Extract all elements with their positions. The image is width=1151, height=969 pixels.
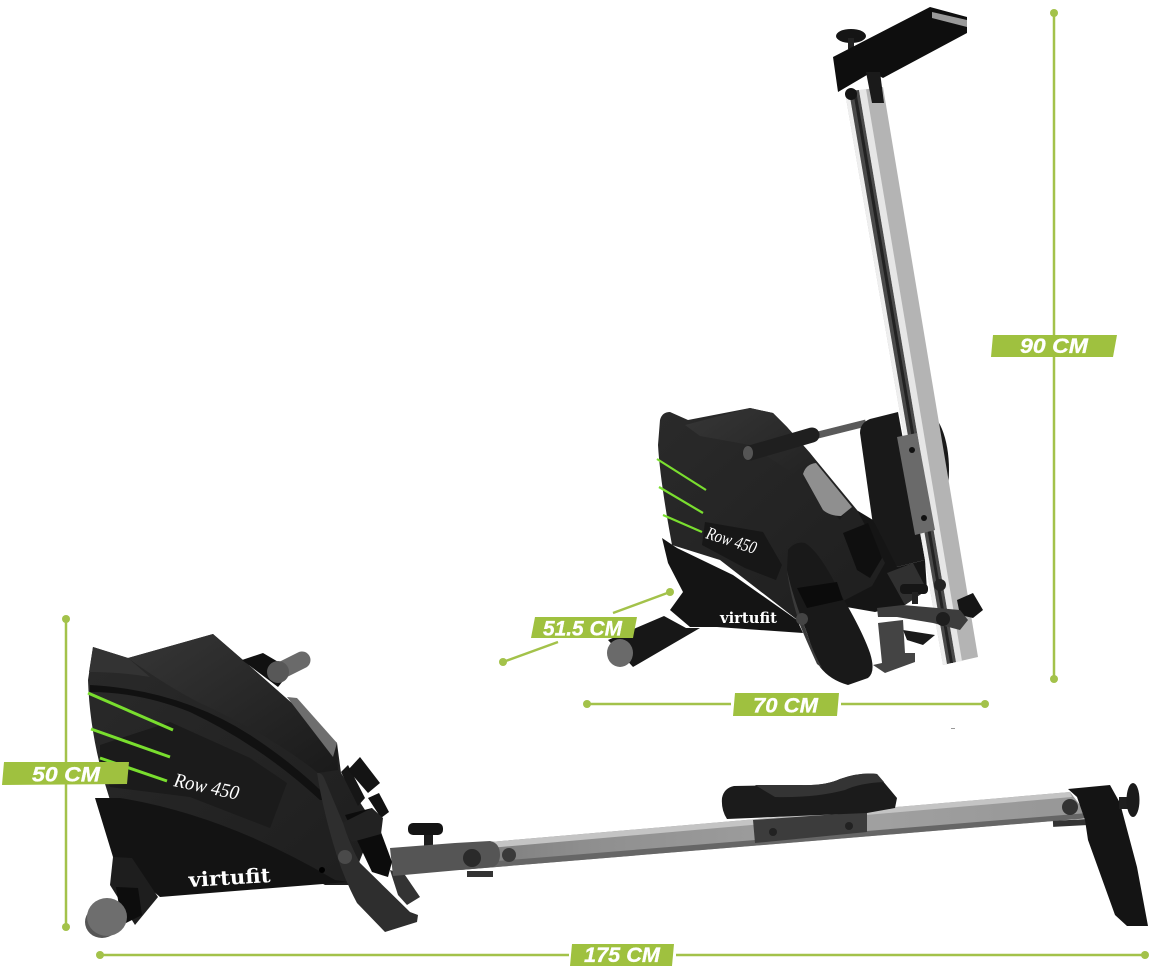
upright housing [658, 408, 885, 622]
upright flywheel disc behind rail [901, 412, 949, 528]
upright rear frame under seat [887, 563, 927, 605]
dimension: 70 cm width [583, 693, 989, 718]
upright rail bracket [897, 433, 983, 618]
flat handle [242, 653, 302, 687]
dimension: 90 cm height [991, 9, 1117, 683]
upright top bracket [833, 7, 967, 103]
flat green stripes [88, 693, 173, 781]
upright seat pad [860, 412, 925, 567]
upright handle grip [743, 435, 812, 460]
upright rear post [873, 584, 968, 673]
flat seat [722, 774, 897, 819]
dimension: 51.5 cm depth: 51.5 CM [543, 618, 622, 640]
dimension: 175 cm length: 175 CM [584, 944, 661, 967]
upright front stabilizer [607, 616, 700, 667]
dimension: 51.5 cm depth [499, 588, 674, 666]
flat end bracket [1053, 783, 1148, 926]
flat top left cap [89, 647, 150, 677]
upright model name: Row 450 [703, 523, 759, 558]
flat foot plate [317, 773, 418, 932]
flat display [287, 697, 337, 757]
flat top cover [128, 634, 338, 773]
upright dark mechanism [835, 500, 927, 612]
dimension: 90 cm height: 90 CM [1020, 335, 1089, 358]
flat base [95, 798, 348, 897]
flat front stabilizer [85, 857, 158, 938]
flat rail [455, 792, 1090, 870]
upright brand: virtufit [719, 609, 777, 627]
flat base bolt [319, 867, 325, 873]
flat side panel [100, 722, 287, 828]
flat lower bracket [390, 870, 420, 905]
upright rail [845, 87, 978, 665]
upright display [803, 463, 852, 516]
flat model name: Row 450 [171, 769, 241, 805]
upright green stripes [657, 459, 706, 532]
upright side panel [702, 522, 782, 580]
dimension: 50 cm height: 50 CM [32, 764, 101, 786]
upright resistance dial [843, 523, 882, 578]
upright rower [607, 7, 983, 685]
upright foot plate [787, 543, 873, 685]
dimension: 70 cm width: 70 CM [753, 694, 819, 718]
dimension: 50 cm height [2, 615, 129, 931]
flat resistance dial [341, 757, 389, 818]
upright top cover [685, 408, 850, 520]
flat rower [85, 634, 1148, 938]
flat housing [88, 634, 372, 885]
flat seat carriage [753, 812, 867, 843]
upright thin handle bar [810, 423, 866, 437]
flat lower band [90, 685, 330, 800]
flat rail arm and bolts [390, 823, 516, 877]
flat brand: virtufit [187, 863, 272, 892]
upright base [662, 538, 803, 633]
dimension: 175 cm length [96, 944, 1149, 967]
